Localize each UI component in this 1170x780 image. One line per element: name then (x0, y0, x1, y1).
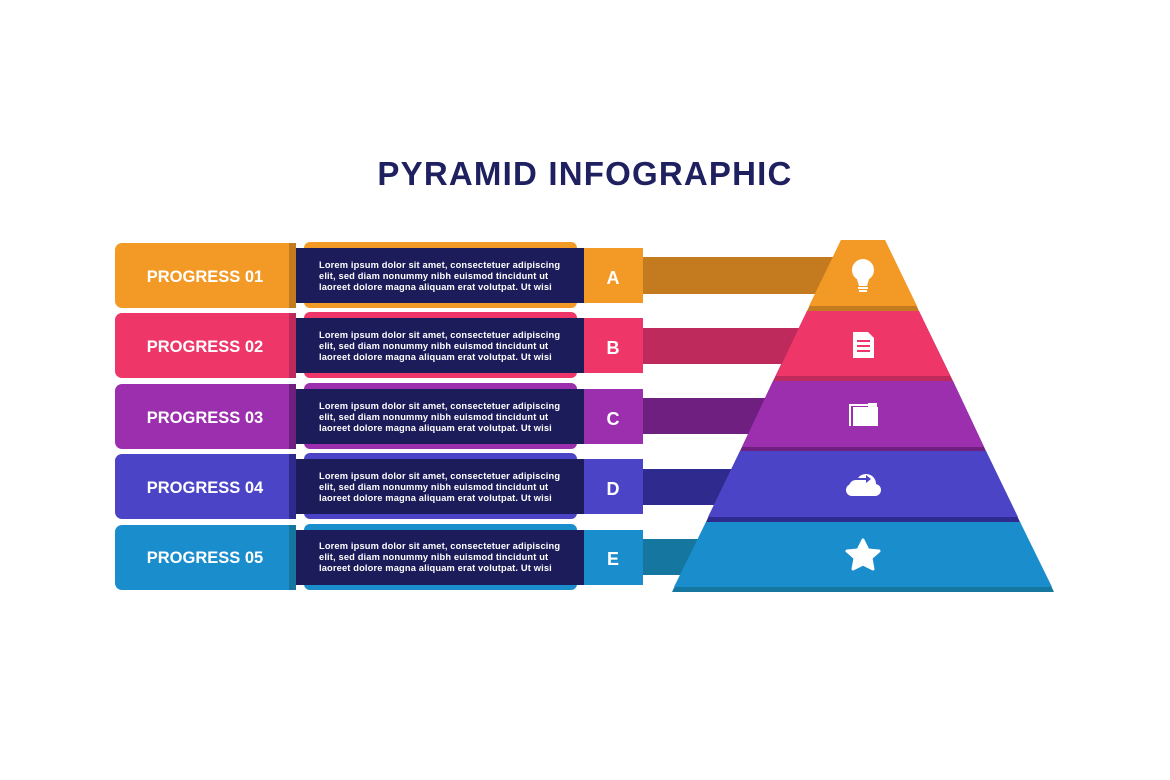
row 2: B (606, 338, 620, 358)
row 1: Lorem ipsum dolor sit amet, consectetuer adipiscing (319, 260, 560, 270)
row 1 (115, 242, 643, 308)
row 3: elit, sed diam nonummy nibh euismod tincidunt ut (319, 412, 548, 422)
row 4: elit, sed diam nonummy nibh euismod tincidunt ut (319, 482, 548, 492)
row 5: laoreet dolore magna aliquam erat volutpat. Ut wisi (319, 563, 552, 573)
row 2: Lorem ipsum dolor sit amet, consectetuer adipiscing (319, 330, 560, 340)
icon: star (847, 540, 879, 569)
icon: lightbulb (852, 259, 874, 292)
row 4 (115, 453, 643, 519)
row 1: A (606, 268, 620, 288)
row 2: PROGRESS 02 (147, 338, 263, 356)
row 5: PROGRESS 05 (147, 549, 263, 567)
row 2: laoreet dolore magna aliquam erat volutpat. Ut wisi (319, 352, 552, 362)
icon: folders (849, 403, 878, 426)
row 4: laoreet dolore magna aliquam erat volutpat. Ut wisi (319, 493, 552, 503)
row 5: elit, sed diam nonummy nibh euismod tincidunt ut (319, 552, 548, 562)
connectors (640, 257, 860, 575)
row 1: elit, sed diam nonummy nibh euismod tincidunt ut (319, 271, 548, 281)
icon: cloud (846, 474, 881, 496)
row 1: laoreet dolore magna aliquam erat volutpat. Ut wisi (319, 282, 552, 292)
row 3: C (606, 409, 620, 429)
row 3: Lorem ipsum dolor sit amet, consectetuer adipiscing (319, 401, 560, 411)
pyramid (672, 240, 1054, 592)
row 3: PROGRESS 03 (147, 409, 263, 427)
row 5 (115, 524, 643, 590)
row 4: PROGRESS 04 (147, 479, 264, 497)
icon: document (853, 332, 874, 358)
row 3: laoreet dolore magna aliquam erat volutpat. Ut wisi (319, 423, 552, 433)
row 4: D (606, 479, 620, 499)
row 5: Lorem ipsum dolor sit amet, consectetuer adipiscing (319, 541, 560, 551)
row 4: Lorem ipsum dolor sit amet, consectetuer adipiscing (319, 471, 560, 481)
row 2 (115, 312, 643, 378)
row 1: PROGRESS 01 (147, 268, 263, 286)
row 2: elit, sed diam nonummy nibh euismod tincidunt ut (319, 341, 548, 351)
row 5: E (607, 549, 619, 569)
row 3 (115, 383, 643, 449)
title: PYRAMID INFOGRAPHIC (377, 155, 793, 192)
